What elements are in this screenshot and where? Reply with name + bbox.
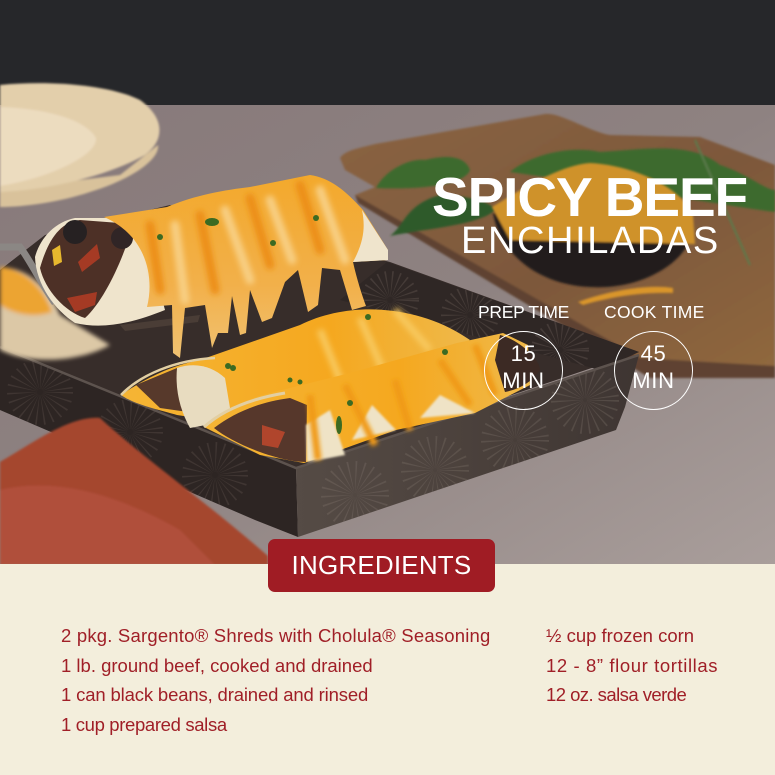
- badge: prep 15 min: [484, 331, 563, 410]
- pan rim: [0, 347, 639, 468]
- badge: cook 45 min: MIN: [632, 368, 675, 393]
- blurred enchilada at left: [0, 267, 110, 360]
- ingredients list, right column: [546, 625, 718, 705]
- ingredients list, left column: 1 lb. ground beef, cooked and drained: [61, 655, 373, 676]
- ingredients list, right column: ½ cup frozen corn: [546, 625, 694, 646]
- red cloth napkin: [0, 418, 268, 565]
- lifted enchilada: [35, 175, 388, 358]
- heading: ingredients: [268, 539, 495, 592]
- pan: [0, 205, 639, 537]
- badge: cook 45 min: 45: [641, 341, 666, 366]
- panel: ingredients: [0, 564, 775, 775]
- label: prep time: PREP TIME: [478, 302, 569, 322]
- badge: prep 15 min: 15: [511, 341, 536, 366]
- food photograph: enchiladas in a baking pan: [0, 0, 775, 564]
- back enchilada in pan: [121, 309, 470, 428]
- badge: cook 45 min: [614, 331, 693, 410]
- ingredients list, right column: 12 oz. salsa verde: [546, 684, 686, 705]
- ingredients list, left column: [61, 625, 491, 735]
- spatula handle: [0, 247, 55, 303]
- badge: prep 15 min: MIN: [502, 368, 545, 393]
- ingredients list, left column: 1 can black beans, drained and rinsed: [61, 684, 368, 705]
- front enchilada in pan: [204, 333, 540, 463]
- subtitle: Enchiladas: ENCHILADAS: [461, 220, 720, 262]
- ingredients list, left column: 1 cup prepared salsa: [61, 714, 227, 735]
- pan right side: [296, 355, 639, 537]
- pan left side: [0, 347, 298, 537]
- heading: ingredients: INGREDIENTS: [292, 550, 471, 580]
- pan back wall: [340, 262, 639, 370]
- title: Spicy Beef: SPICY BEEF: [432, 166, 747, 228]
- tortilla stack: [0, 83, 159, 207]
- herbs on board: [376, 140, 775, 265]
- ingredients list, left column: 2 pkg. Sargento® Shreds with Cholula® Seasoning: [61, 625, 491, 646]
- salsa bowl: [492, 163, 695, 305]
- parsley flecks: [157, 215, 448, 434]
- cutting board: [340, 114, 775, 378]
- ingredients list, right column: 12 - 8” flour tortillas: [546, 655, 718, 676]
- label: cook time: COOK TIME: [604, 302, 705, 322]
